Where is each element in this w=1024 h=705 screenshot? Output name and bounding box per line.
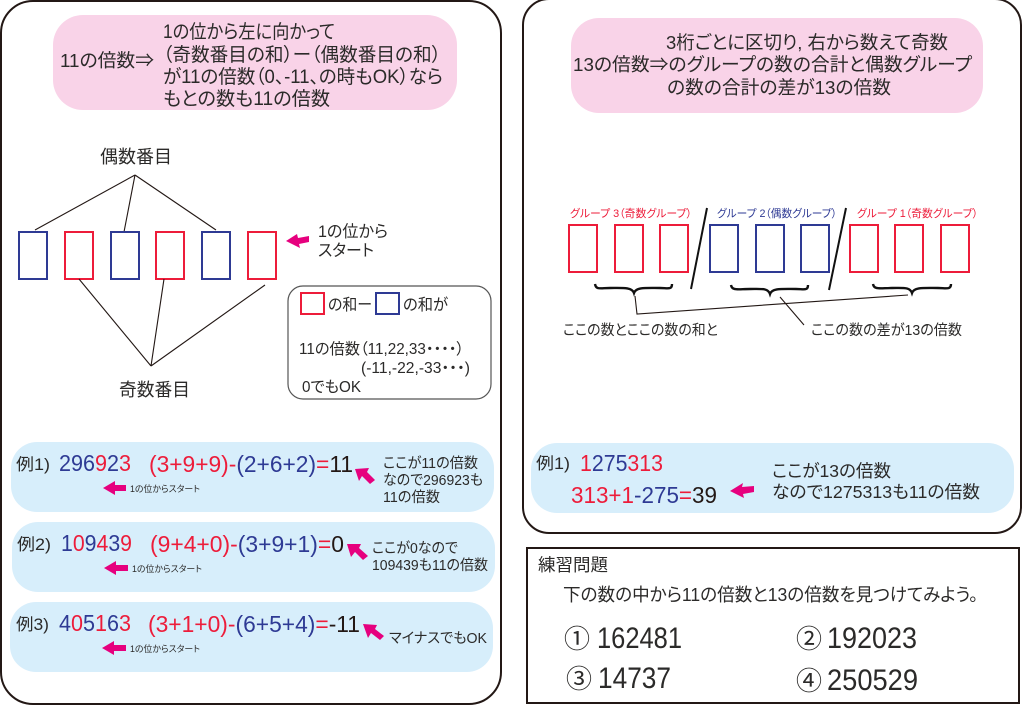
example: 例1) bbox=[536, 454, 570, 473]
label: start from ones place bbox=[318, 222, 388, 260]
rule box: multiples of 13: 13の倍数⇒のグループの数の合計と偶数グループ bbox=[573, 54, 973, 75]
rule box: multiples of 13: の数の合計の差が13の倍数 bbox=[667, 77, 891, 98]
caption: 1の位からスタート bbox=[130, 643, 200, 654]
note: ここが0なので bbox=[372, 540, 458, 557]
problem 1: ① bbox=[564, 624, 590, 654]
example: 313+1-275=39 bbox=[571, 482, 717, 508]
example 2: 109439 bbox=[61, 530, 132, 556]
example 1: (3+9+9)-(2+6+2)=11 bbox=[149, 451, 353, 477]
rule box: multiples of 11: もとの数も11の倍数 bbox=[163, 88, 330, 110]
note: ここが11の倍数 bbox=[383, 455, 478, 472]
heading: 練習問題 bbox=[538, 555, 608, 575]
note: ここが13の倍数 bbox=[772, 461, 891, 481]
problem 4: ④ bbox=[796, 666, 822, 696]
label: start from ones place: スタート bbox=[318, 241, 374, 260]
problem 2: ② bbox=[796, 624, 822, 654]
label: start from ones place: 1の位から bbox=[318, 222, 388, 241]
example 2 bbox=[12, 522, 495, 592]
braces bbox=[595, 284, 951, 294]
group labels bbox=[570, 206, 978, 220]
rule box: multiples of 13: 3桁ごとに区切り, 右から数えて奇数 bbox=[666, 32, 948, 53]
note: なので1275313も11の倍数 bbox=[772, 482, 980, 502]
label: sum: ここの数とここの数の和と bbox=[563, 322, 718, 339]
example 3: (3+1+0)-(6+5+4)=-11 bbox=[148, 611, 360, 637]
note: 11の倍数 bbox=[383, 489, 440, 506]
problem 3: 14737 bbox=[598, 662, 671, 695]
example 1 bbox=[11, 442, 494, 512]
arrow: result bbox=[363, 624, 384, 640]
example 3: 405163 bbox=[59, 610, 131, 636]
problem 4: 250529 bbox=[827, 664, 918, 697]
note box: rule summary bbox=[288, 286, 491, 399]
rule box: multiples of 11: が11の倍数（0、-11、の時もOK）なら bbox=[163, 66, 443, 88]
arrow bbox=[730, 483, 754, 498]
connector lines: even positions bbox=[35, 175, 216, 232]
panel: multiples of 11 bbox=[1, 1, 501, 704]
label: difference: ここの数の差が13の倍数 bbox=[811, 322, 962, 339]
problem 3 bbox=[566, 662, 671, 695]
panel: multiples of 13 bbox=[523, 0, 1021, 533]
note: なので296923も bbox=[383, 472, 483, 489]
panel: practice problems bbox=[527, 548, 1019, 703]
example 3: 例3) bbox=[16, 615, 49, 634]
group digit boxes bbox=[569, 225, 969, 272]
problem 1 bbox=[564, 622, 682, 655]
arrow: result bbox=[347, 544, 368, 560]
arrow: start bbox=[102, 641, 126, 655]
arrow: start bbox=[103, 481, 126, 495]
instruction: 下の数の中から11の倍数と13の倍数を見つけてみよう。 bbox=[563, 585, 978, 605]
example bbox=[531, 443, 1014, 513]
arrow: start bbox=[104, 561, 128, 575]
heading: even positions: 偶数番目 bbox=[100, 147, 172, 167]
example 1: 例1) bbox=[16, 455, 50, 474]
rule box: multiples of 11: 11の倍数⇒ bbox=[60, 50, 154, 71]
note box: rule summary: の和ー bbox=[328, 296, 372, 314]
arrow: start from ones place bbox=[286, 234, 309, 248]
caption: 1の位からスタート bbox=[130, 483, 200, 494]
brace connector lines bbox=[635, 295, 908, 325]
note: マイナスでもOK bbox=[389, 630, 487, 647]
example: 1275313 bbox=[580, 450, 663, 476]
group labels: グループ 3（奇数グループ） bbox=[570, 206, 692, 220]
arrow: result bbox=[355, 468, 375, 484]
note bbox=[372, 540, 488, 574]
digit boxes bbox=[19, 232, 276, 279]
example 1: 296923 bbox=[59, 450, 131, 476]
problem 4 bbox=[796, 664, 918, 697]
group separators bbox=[691, 208, 846, 290]
example 2: (9+4+0)-(3+9+1)=0 bbox=[150, 531, 344, 557]
note box: rule summary: 0でもOK bbox=[302, 378, 362, 396]
problem 2 bbox=[796, 622, 917, 655]
heading: odd positions: 奇数番目 bbox=[119, 380, 190, 400]
rule box: multiples of 11 bbox=[53, 15, 457, 110]
example 2: 例2) bbox=[17, 535, 51, 554]
group labels: グループ 2（偶数グループ） bbox=[717, 206, 837, 220]
problem 2: 192023 bbox=[827, 622, 917, 655]
connector lines: odd positions bbox=[79, 279, 265, 366]
rule box: multiples of 13 bbox=[571, 18, 983, 113]
note box: rule summary: の和が bbox=[403, 296, 448, 314]
note bbox=[383, 455, 483, 506]
note bbox=[772, 461, 980, 502]
note: 109439も11の倍数 bbox=[372, 557, 488, 574]
example 3 bbox=[10, 602, 493, 672]
note box: rule summary: (-11,-22,-33・・・) bbox=[361, 360, 470, 377]
group labels: グループ 1（奇数グループ） bbox=[857, 206, 978, 220]
problem 1: 162481 bbox=[597, 622, 682, 655]
rule box: multiples of 11: （奇数番目の和）ー（偶数番目の和） bbox=[163, 44, 441, 66]
caption: 1の位からスタート bbox=[132, 563, 202, 574]
problem 3: ③ bbox=[566, 664, 592, 694]
rule box: multiples of 11: 1の位から左に向かって bbox=[163, 21, 335, 43]
note box: rule summary: 11の倍数（11,22,33・・・・） bbox=[299, 340, 464, 358]
